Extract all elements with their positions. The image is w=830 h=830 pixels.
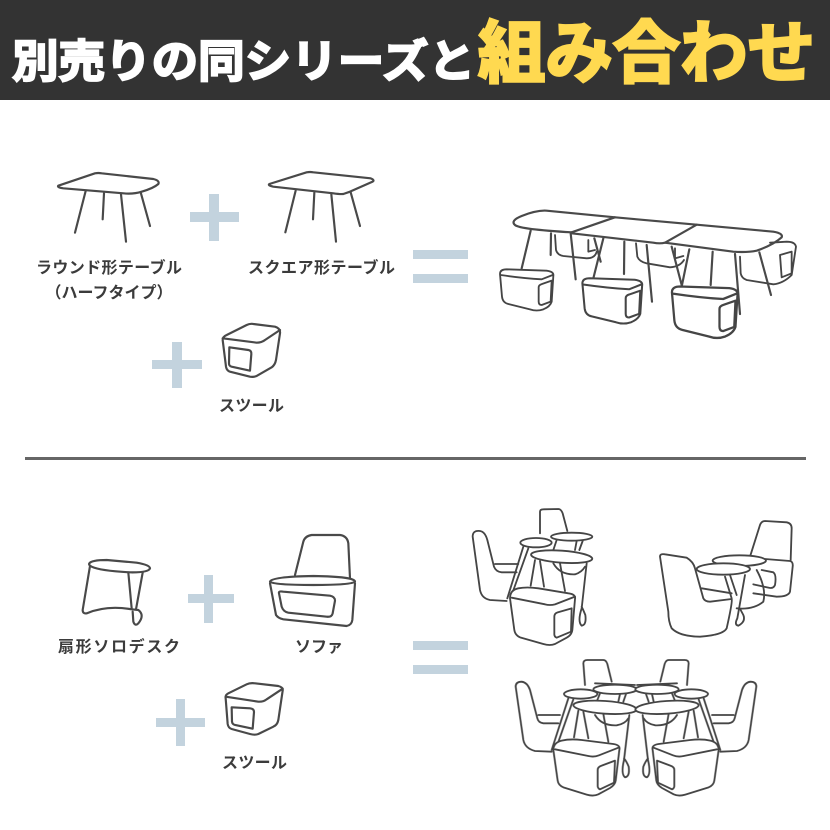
combination: desk with sofas (660, 521, 793, 637)
label: fan-shaped solo desk: 扇形ソロデスク (58, 637, 180, 656)
icon: stool (223, 324, 280, 377)
label: square table: スクエア形テーブル (248, 258, 395, 277)
section 1 parts (58, 172, 373, 377)
combination: two-desk cluster (473, 509, 593, 645)
plus sign (152, 342, 202, 388)
icon: stool (226, 683, 283, 735)
icon: square table (269, 172, 373, 242)
plus sign (190, 194, 239, 241)
equals sign (413, 250, 468, 283)
label: round table (36, 258, 182, 302)
plus sign (156, 699, 205, 746)
combination: long table with stools (500, 211, 796, 338)
label: round table: （ハーフタイプ） (45, 284, 173, 302)
label: round table: ラウンド形テーブル (36, 258, 182, 277)
icon: fan-shaped solo desk (83, 560, 150, 625)
equals sign (413, 641, 468, 674)
header band (0, 0, 830, 100)
title: white part: 別売りの同シリーズと (12, 36, 475, 87)
title: yellow part: 組み合わせ (478, 16, 815, 92)
plus sign (188, 575, 234, 623)
section 2 parts (83, 535, 355, 735)
label: stool: スツール (222, 755, 287, 772)
label: stool: スツール (219, 398, 284, 415)
combination: four-desk cluster (516, 660, 756, 796)
icon: round table (58, 173, 159, 242)
label: sofa: ソファ (295, 639, 343, 656)
icon: sofa (270, 535, 355, 626)
